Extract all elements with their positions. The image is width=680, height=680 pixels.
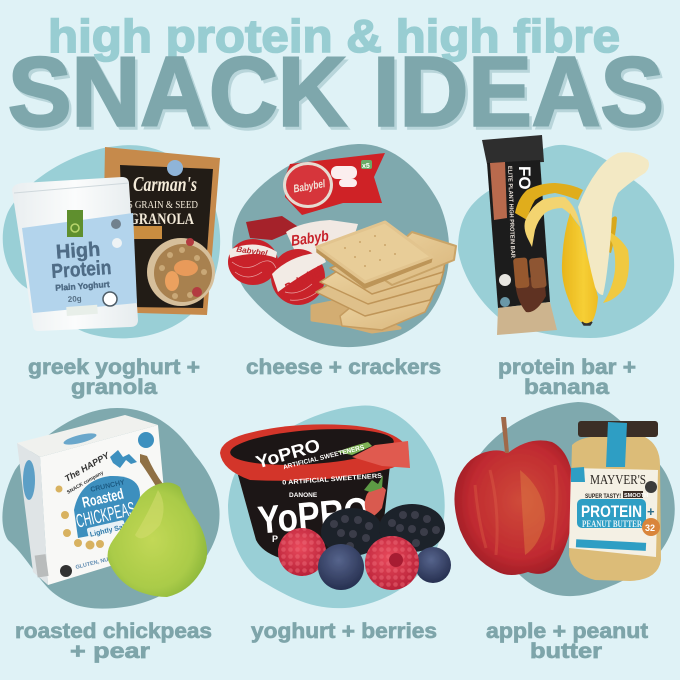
label: greek yoghurt + granola (28, 356, 200, 399)
peanut butter jar: SMOOTH (624, 493, 648, 499)
yopro tub: YoPRO (253, 435, 322, 472)
babybel net bag: x5 (362, 163, 370, 170)
blob background (228, 406, 445, 608)
label: protein bar + banana: banana (524, 376, 609, 399)
peanut butter jar: PROTEIN (581, 503, 642, 521)
peanut butter jar: 32 (645, 523, 655, 533)
babybel net bag: Babybel (293, 178, 327, 195)
blob background (232, 144, 449, 347)
babybel cheeses (228, 216, 358, 305)
panel: roasted chickpeas + pear (2, 408, 220, 609)
label: roasted chickpeas + pear (15, 620, 212, 663)
blob background (2, 408, 220, 609)
label: greek yoghurt + granola: greek yoghurt + (28, 356, 200, 379)
label: apple + peanut butter: butter (530, 640, 602, 663)
yopro tub: ARTIFICIAL SWEETENERS (283, 444, 366, 471)
blob background (478, 402, 675, 596)
peanut butter jar: + (647, 504, 655, 519)
chickpeas box: SNACK company (66, 470, 105, 496)
label: greek yoghurt + granola: granola (71, 376, 157, 399)
granola box (102, 147, 220, 315)
yopro tub: DANONE (289, 492, 318, 499)
babybel net bag (283, 153, 385, 215)
granola box: Carman's (133, 172, 197, 196)
label: cheese + crackers: cheese + crackers (246, 356, 441, 379)
chickpeas box: Lightly Salted (89, 521, 136, 539)
yopro tub: YoPRO (256, 490, 371, 543)
label: apple + peanut butter: apple + peanut (486, 620, 648, 643)
yoghurt tub: High (55, 239, 101, 264)
peanut butter jar: SUPER TASTY! (585, 493, 621, 500)
peanut butter jar: MAYVER'S (590, 472, 646, 487)
babybel cheeses: Babyb (290, 228, 330, 250)
chickpeas box: The HAPPY (63, 450, 112, 484)
panel: yoghurt + berries (220, 406, 451, 608)
yoghurt tub (12, 177, 138, 331)
protein bar (482, 135, 557, 335)
label: roasted chickpeas + pear: + pear (70, 640, 150, 663)
yoghurt tub: 20g (68, 294, 82, 304)
label: roasted chickpeas + pear: roasted chickpeas (15, 620, 212, 643)
yopro tub (220, 424, 410, 558)
peanut butter jar: PEANUT BUTTER (582, 519, 642, 529)
chickpeas box (17, 415, 164, 585)
panel: greek yoghurt + granola (3, 145, 220, 338)
chickpeas box: GLUTEN, NUT (75, 556, 113, 571)
label: protein bar + banana (498, 356, 636, 399)
granola box: 5 GRAIN & SEED (128, 200, 198, 211)
panel: cheese + crackers (228, 144, 456, 347)
chickpeas box: Roasted (81, 486, 125, 512)
berries (278, 504, 451, 590)
banana (515, 152, 649, 325)
peanut butter jar (569, 421, 661, 581)
babybel cheeses: Babybel (282, 263, 325, 296)
label: yoghurt + berries: yoghurt + berries (251, 620, 437, 643)
apple (454, 417, 574, 575)
panel: apple + peanut butter (454, 402, 675, 596)
subtitle: high protein & high fibre: high protein & high fibre (48, 10, 620, 62)
chickpeas box: CRUNCHY (90, 479, 126, 494)
yoghurt tub: Plain Yoghurt (55, 279, 110, 293)
blob background (458, 145, 674, 338)
protein bar: ELITE PLANT HIGH PROTEIN BAR (506, 166, 515, 259)
crackers (312, 222, 456, 332)
panel: protein bar + banana (458, 135, 674, 338)
yopro tub: P (272, 534, 278, 544)
granola box: GRANOLA (129, 211, 195, 228)
protein bar: FO (515, 166, 534, 190)
pear (108, 454, 207, 597)
yopro tub: 0 ARTIFICIAL SWEETENERS (282, 473, 383, 487)
chickpeas box: CHICKPEAS (74, 499, 137, 533)
label: protein bar + banana: protein bar + (498, 356, 636, 379)
yoghurt tub: Protein (51, 257, 112, 283)
label: apple + peanut butter (486, 620, 648, 663)
blob background (3, 145, 220, 338)
babybel cheeses: Babybel (236, 245, 269, 258)
title: SNACK IDEAS: SNACK IDEAS (10, 40, 666, 150)
title: SNACK IDEAS: SNACK IDEAS (8, 36, 664, 146)
